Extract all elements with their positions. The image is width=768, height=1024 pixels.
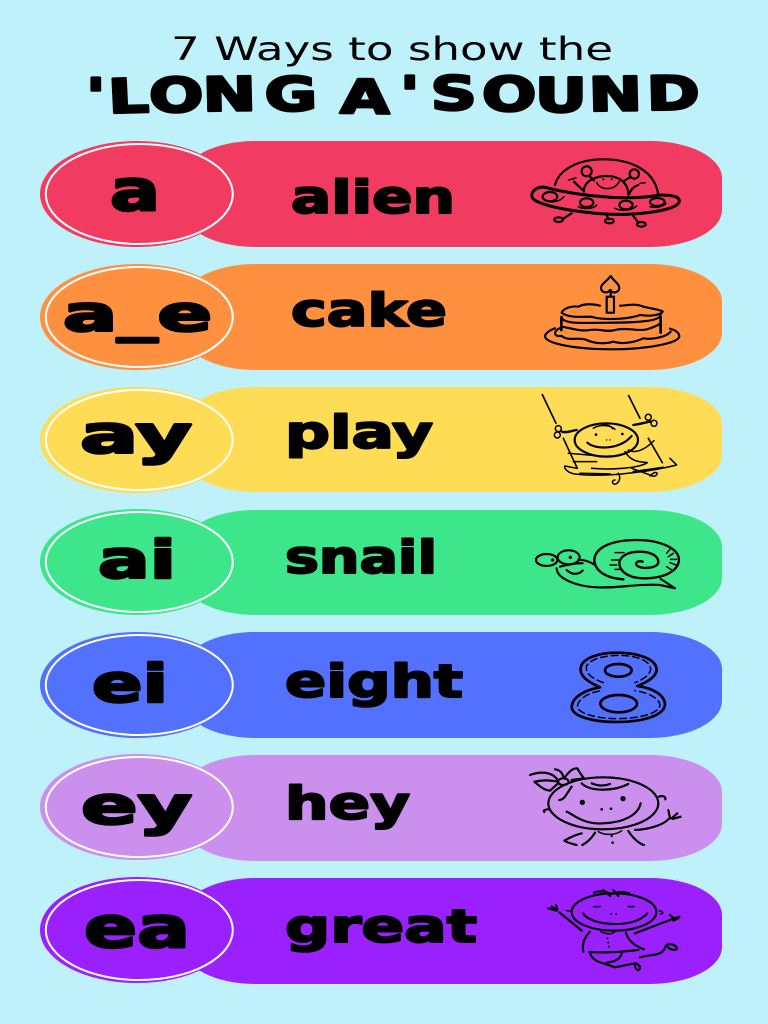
- grapheme badge: ea: [84, 895, 190, 961]
- word: snail: [285, 531, 437, 584]
- grapheme badge: [40, 141, 234, 247]
- grapheme badge: ay: [80, 405, 192, 466]
- grapheme badge: [40, 754, 234, 860]
- icon: snail: [536, 540, 679, 588]
- title line 1: 7 Ways to show the: [171, 30, 613, 68]
- word: alien: [291, 171, 455, 224]
- word: great: [285, 900, 477, 953]
- grapheme badge: a: [110, 159, 160, 224]
- icon: birthday cake: [545, 276, 679, 349]
- word: cake: [291, 284, 447, 337]
- icon: child on swing: [542, 395, 677, 484]
- grapheme badge: [40, 877, 234, 983]
- word: eight: [285, 655, 463, 708]
- grapheme badge: ey: [81, 776, 192, 837]
- panel: ay / play: [40, 387, 722, 493]
- panel: a / alien: [40, 141, 722, 247]
- pill: [183, 141, 722, 247]
- pill: [183, 632, 722, 738]
- panel: ey / hey: [40, 754, 722, 861]
- grapheme badge: [40, 509, 234, 615]
- icon: girl with bow: [530, 768, 681, 845]
- pill: [183, 510, 722, 615]
- pill: [183, 387, 722, 492]
- pill: [183, 755, 722, 861]
- panel: a_e / cake: [40, 264, 722, 370]
- grapheme badge: [40, 264, 234, 370]
- icon: number eight: [572, 653, 665, 722]
- icon: jumping child: [548, 890, 679, 970]
- grapheme badge: ai: [98, 530, 176, 591]
- panel: ei / eight: [40, 632, 722, 738]
- grapheme badge: ei: [92, 654, 168, 715]
- grapheme badge: a_e: [63, 286, 212, 343]
- grapheme badge: [40, 387, 234, 493]
- word: hey: [285, 777, 410, 830]
- title: [86, 30, 700, 125]
- word: play: [285, 406, 433, 459]
- icon: alien in flying saucer: [532, 159, 679, 227]
- pill: [183, 264, 722, 370]
- panel: ea / great: [40, 877, 722, 984]
- pill: [183, 878, 722, 984]
- grapheme badge: [40, 632, 234, 738]
- title line 2: 'LONG A' SOUND: [86, 67, 700, 125]
- panel: ai / snail: [40, 509, 722, 615]
